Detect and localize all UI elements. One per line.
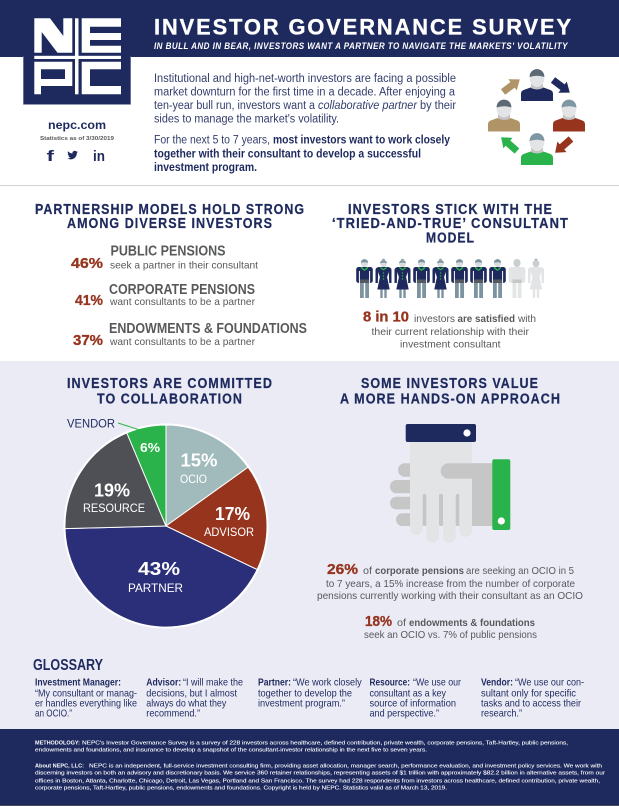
stat: public pensions: seek a partner in their consultant: [110, 260, 258, 272]
stat: corporate pensions: want consultants to be a partner: [109, 296, 255, 308]
label: 43% Partner: 43%: [138, 558, 180, 579]
stat: 8 in 10 satisfied: are satisfied: [458, 313, 515, 325]
website and statistics date: [40, 120, 114, 142]
icon: circle of people with arrows: [488, 69, 585, 165]
stat: 26% corporate pensions: are seeking an OCIO in 5: [466, 565, 574, 577]
slice: Advisor 17%: [166, 467, 267, 570]
stat: public pensions: 46%: [71, 256, 103, 272]
intro text: by their: [420, 100, 456, 112]
stat: 8 in 10 satisfied: [363, 310, 536, 350]
heading: glossary: GLOSSARY: [33, 657, 104, 674]
glossary: investment manager: an OCIO.”: [35, 709, 72, 720]
glossary: resource: Resource:: [370, 678, 410, 689]
heading: hands-on approach: SOME INVESTORS VALUE: [361, 376, 539, 392]
label: 19% Resource: [83, 480, 145, 515]
stat: corporate pensions: 41%: [75, 293, 103, 309]
glossary: vendor: sultant only for specific: [481, 689, 576, 700]
label: 15% OCIO: 15%: [180, 450, 218, 470]
about NEPC note: offices in Boston, Atlanta, Charlotte, Chicago, Detroit, Las Vegas, Portland and San Francisco. The survey had 228 respondents from investors across healthcare, defined contribution, private wealth,: [35, 778, 601, 784]
glossary: advisor: [146, 678, 243, 720]
about NEPC note: NEPC is an independent, full-service investment consulting firm, providing asset allocation, manager search, performance evaluation, and investment policy services. We work with: [89, 764, 602, 770]
glossary: advisor: Advisor:: [146, 678, 181, 689]
heading: partnership models: PARTNERSHIP MODELS HOLD STRONG: [35, 202, 305, 218]
icon: handshake: [390, 424, 510, 543]
about NEPC note: discerning investors on both an advisory and discretionary basis. We service 360 retainer relationships, representing assets of $1 trillion with approximately $82.2 billion in alternative assets, from our: [35, 771, 605, 777]
glossary: vendor: Vendor:: [481, 678, 513, 689]
arrow: green: [497, 132, 522, 156]
slice: OCIO 15%: [166, 425, 248, 526]
label: 43% Partner: [128, 558, 183, 595]
label: 17% Advisor: ADVISOR: [204, 525, 254, 539]
stat: 18% endowments and foundations: endowments & foundations: [409, 617, 535, 629]
website and statistics date: Statistics as of 3/30/2019: [40, 136, 114, 142]
heading: committed to collaboration: INVESTORS ARE COMMITTED: [67, 376, 273, 392]
label: 17% Advisor: [204, 503, 254, 539]
heading: investors stick: MODEL: [426, 230, 475, 246]
stat: public pensions: PUBLIC PENSIONS: [110, 244, 226, 260]
label: 19% Resource: 19%: [94, 480, 130, 500]
heading: investors stick: ‘TRIED-AND-TRUE’ CONSULTANT: [332, 216, 569, 232]
stat: 18% endowments and foundations: seek an OCIO vs. 7% of public pensions: [364, 629, 537, 641]
glossary: resource: “We use our: [413, 678, 462, 689]
about NEPC note: About NEPC, LLC:: [35, 764, 84, 770]
glossary: investment manager: “My consultant or manag-: [35, 689, 137, 700]
glossary: vendor: [481, 678, 584, 720]
glossary: partner: Partner:: [258, 678, 291, 689]
intro text: Institutional and high-net-worth investors are facing a possible: [154, 73, 456, 85]
about NEPC note: corporate pensions, Taft-Hartley, public pensions, endowments and foundations. Copyright is held by NEPC. Statistics valid as of March 13, 2019.: [35, 785, 447, 791]
pie chart: consultant role: [64, 424, 268, 628]
stat: 8 in 10 satisfied: investors: [414, 313, 455, 325]
slice: Vendor 6%: [127, 425, 166, 526]
intro text: together with their consultant to develop a successful: [154, 148, 421, 160]
website and statistics date: nepc.com: [48, 120, 106, 132]
person: green: [521, 133, 553, 165]
glossary: vendor: tasks and to access their: [481, 699, 582, 710]
person: tan: [488, 100, 520, 132]
arrow: navy: [549, 74, 574, 98]
label: 6%: 6%: [140, 440, 160, 455]
stat: 26% corporate pensions: pensions currently working with their consultant as an OCIO: [317, 590, 583, 602]
label: 17% Advisor: 17%: [215, 503, 250, 524]
glossary: resource: and perspective.”: [370, 709, 440, 720]
stat: 8 in 10 satisfied: with: [517, 313, 536, 325]
intro text: market downturn for the first time in a decade. After enjoying a: [154, 86, 456, 98]
stat: 26% corporate pensions: 26%: [327, 562, 358, 578]
heading: hands-on approach: [340, 376, 561, 408]
glossary: resource: [370, 678, 462, 720]
pictogram: 8 in 10 investors: [356, 259, 544, 298]
intro text: most investors want to work closely: [273, 134, 451, 146]
methodology note: NEPC's Investor Governance Survey is a survey of 228 investors across healthcare, defined contribution, private wealth, corporate pensions, Taft-Hartley, public pensions,: [82, 741, 569, 747]
icon: social media: [46, 148, 105, 165]
icon: social media: in: [93, 148, 105, 165]
intro text: sides to manage the market's volatility.: [154, 114, 339, 126]
stat: endowments and foundations: [73, 321, 307, 349]
heading: partnership models: [35, 202, 305, 232]
stat: corporate pensions: CORPORATE PENSIONS: [109, 282, 255, 298]
glossary: vendor: “We use our con-: [515, 678, 584, 689]
glossary: investment manager: [35, 678, 137, 720]
methodology note: METHODOLOGY:: [35, 741, 80, 747]
stat: 18% endowments and foundations: [364, 614, 537, 641]
heading: committed to collaboration: [67, 376, 273, 408]
methodology note: [35, 741, 569, 754]
stat: 18% endowments and foundations: 18%: [365, 614, 392, 630]
glossary: advisor: “I will make the: [183, 678, 243, 689]
NEPC logo: [20, 0, 140, 104]
stat: 26% corporate pensions: corporate pensions: [375, 565, 464, 577]
glossary: advisor: always do what they: [146, 699, 227, 710]
subtitle: IN BULL AND IN BEAR, INVESTORS WANT A PARTNER TO NAVIGATE THE MARKETS' VOLATILITY: [154, 41, 568, 51]
label: 43% Partner: PARTNER: [128, 581, 183, 595]
glossary: partner: [258, 678, 362, 710]
glossary: advisor: decisions, but I almost: [146, 689, 237, 700]
glossary: advisor: recommend.”: [146, 709, 201, 720]
stat: 18% endowments and foundations: of: [397, 617, 406, 629]
intro text: investment program.: [154, 162, 257, 174]
arrow: rust: [551, 134, 576, 158]
intro text: ten-year bull run, investors want a: [154, 100, 316, 112]
glossary: resource: source of information: [370, 699, 456, 710]
icon: social media: f: [46, 148, 56, 165]
glossary: resource: consultant as a key: [370, 689, 447, 700]
glossary: investment manager: er handles everything like: [35, 699, 137, 710]
slice: Partner 43%: [65, 526, 257, 627]
about NEPC note: [35, 764, 605, 791]
stat: 26% corporate pensions: of: [363, 565, 372, 577]
page background: lavender section: [0, 361, 619, 729]
stat: 8 in 10 satisfied: their current relationship with their: [372, 326, 529, 338]
intro text: collaborative partner: [318, 100, 418, 112]
stat: 8 in 10 satisfied: investment consultant: [400, 338, 501, 350]
person: rust: [553, 100, 585, 132]
footer panel: [0, 729, 619, 806]
stat: 8 in 10 satisfied: 8 in 10: [363, 310, 409, 326]
stat: corporate pensions: [75, 282, 255, 309]
title: INVESTOR GOVERNANCE SURVEY: [154, 14, 573, 40]
glossary: investment manager: Investment Manager:: [35, 678, 121, 689]
stat: endowments and foundations: 37%: [73, 333, 103, 349]
intro text: For the next 5 to 7 years,: [154, 134, 270, 146]
label: 19% Resource: RESOURCE: [83, 501, 145, 515]
heading: committed to collaboration: TO COLLABORATION: [97, 392, 243, 408]
label: 15% OCIO: OCIO: [180, 472, 207, 486]
glossary: partner: “We work closely: [293, 678, 362, 689]
methodology note: endowments and foundations, and insurance to develop a snapshot of the consultant-investor relationship in the next five to seven years.: [35, 748, 428, 754]
stat: 26% corporate pensions: to 7 years, a 15% increase from the number of corporate: [326, 578, 575, 590]
slice: Resource 19%: [65, 433, 166, 529]
stat: endowments and foundations: want consultants to be a partner: [109, 336, 255, 348]
stat: public pensions: [71, 244, 258, 272]
glossary: partner: together to develop the: [258, 689, 352, 700]
header banner: [0, 0, 619, 57]
label: 15% OCIO: [180, 450, 218, 486]
heading: investors stick: [332, 202, 569, 246]
callout: vendor label: VENDOR: [67, 416, 115, 430]
stat: endowments and foundations: ENDOWMENTS & FOUNDATIONS: [109, 321, 307, 337]
glossary: partner: investment program.”: [258, 699, 346, 710]
heading: investors stick: INVESTORS STICK WITH THE: [348, 202, 553, 218]
person: navy: [521, 69, 553, 101]
heading: partnership models: AMONG DIVERSE INVESTORS: [67, 216, 273, 232]
heading: hands-on approach: A MORE HANDS-ON APPROACH: [340, 392, 561, 408]
intro text: [154, 73, 456, 174]
stat: 26% corporate pensions: [317, 562, 583, 602]
glossary: vendor: research.”: [481, 709, 523, 720]
arrow: tan: [499, 74, 524, 98]
